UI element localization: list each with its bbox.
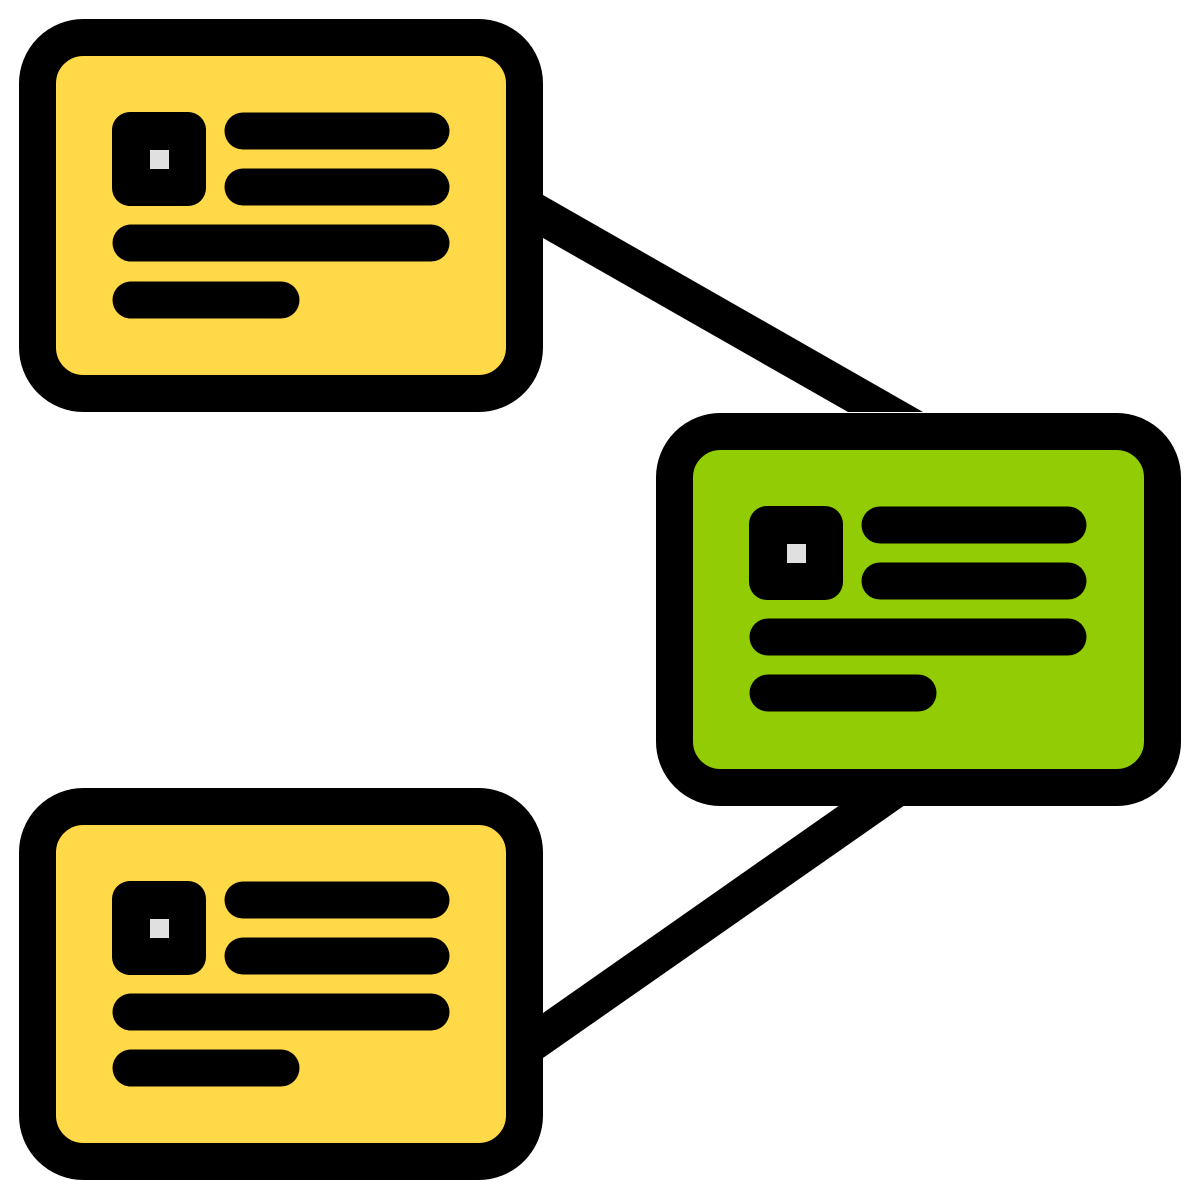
- arrow: top connector: [543, 195, 923, 412]
- arrow: bottom connector: [543, 805, 905, 1058]
- panel: bottom yellow card: [38, 806, 524, 1162]
- text lines: [131, 900, 431, 1068]
- icon: image square: [112, 881, 206, 975]
- text lines: [131, 131, 431, 300]
- icon: image square: [749, 506, 843, 600]
- panel: top yellow card: [38, 38, 524, 394]
- icon: image square: [112, 112, 206, 206]
- text lines: [768, 525, 1068, 693]
- panel: green card: [674, 432, 1162, 788]
